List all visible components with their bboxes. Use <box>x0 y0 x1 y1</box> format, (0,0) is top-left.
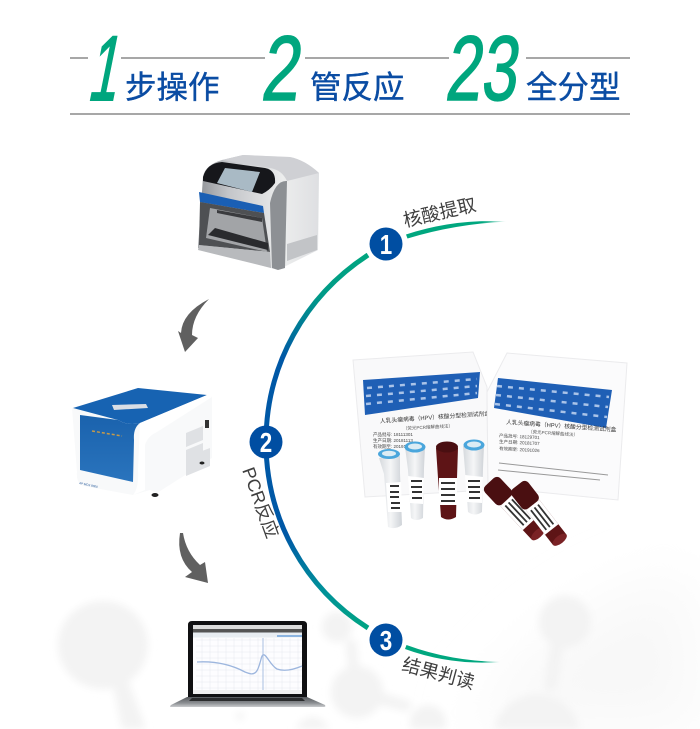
arrow: PCR to results <box>179 533 208 583</box>
red vial lying, front <box>482 475 548 544</box>
kit box, left: 有效期至: 20191027 <box>373 443 414 450</box>
label: nucleic acid extraction: 核酸提取 <box>401 194 478 231</box>
clear vial with blue cap 3 <box>463 440 484 514</box>
title: 1 step, 2 tubes, 23 genotypes: 23 <box>442 17 527 120</box>
kit box, right: 产品批号: 18129701 <box>499 432 540 441</box>
kit box, left: 生产日期: 20181113 <box>373 437 413 444</box>
kit box, right: 有效期至: 20191026 <box>499 445 540 454</box>
step 2 badge <box>250 426 282 459</box>
kit box, left: （荧光PCR熔解曲线法） <box>403 422 453 432</box>
label: PCR reaction: PCR反应 <box>238 465 282 541</box>
title: 1 step, 2 tubes, 23 genotypes: 步操作 <box>125 69 220 105</box>
kit box, right <box>487 353 627 500</box>
icon: laptop showing amplification curve <box>170 621 325 707</box>
title: 1 step, 2 tubes, 23 genotypes: 管反应 <box>310 69 405 105</box>
process arc: curve linking the three steps <box>266 221 507 663</box>
red vial <box>436 442 458 520</box>
red vial lying, back <box>509 479 570 549</box>
label: result reading: 结果判读 <box>400 654 477 693</box>
step 2 badge: 2 <box>260 428 272 459</box>
title: 1 step, 2 tubes, 23 genotypes <box>70 17 630 121</box>
arrow: extraction to PCR <box>178 299 209 352</box>
step 3 badge: 3 <box>380 626 392 657</box>
clear vial with blue cap 1 <box>378 449 402 528</box>
icon: HPV genotyping kit boxes and vials <box>353 352 627 549</box>
background: faint molecule pattern <box>58 575 700 729</box>
step 3 badge <box>370 624 402 657</box>
step 1 badge <box>370 228 402 261</box>
icon: PCR instrument: AP MDX 8000 <box>79 481 98 489</box>
kit box, right: 人乳头瘤病毒（HPV）核酸分型检测试剂盒 <box>506 418 617 434</box>
kit box, left: 人乳头瘤病毒（HPV）核酸分型检测试剂盒 <box>380 409 491 425</box>
icon: PCR instrument <box>72 388 212 497</box>
clear vial with blue cap 2 <box>404 442 426 520</box>
title: 1 step, 2 tubes, 23 genotypes: 1 <box>83 17 132 121</box>
kit box, left <box>353 352 491 497</box>
step 1 badge: 1 <box>380 230 392 261</box>
kit box, right: （荧光PCR熔解曲线法） <box>528 428 578 438</box>
title: 1 step, 2 tubes, 23 genotypes: 2 <box>257 17 309 120</box>
kit box, left: 产品批号: 18111301 <box>373 431 413 438</box>
title: 1 step, 2 tubes, 23 genotypes: 全分型 <box>526 69 621 105</box>
kit box, right: 生产日期: 20181707 <box>499 438 540 447</box>
icon: nucleic acid extraction instrument <box>198 155 319 270</box>
